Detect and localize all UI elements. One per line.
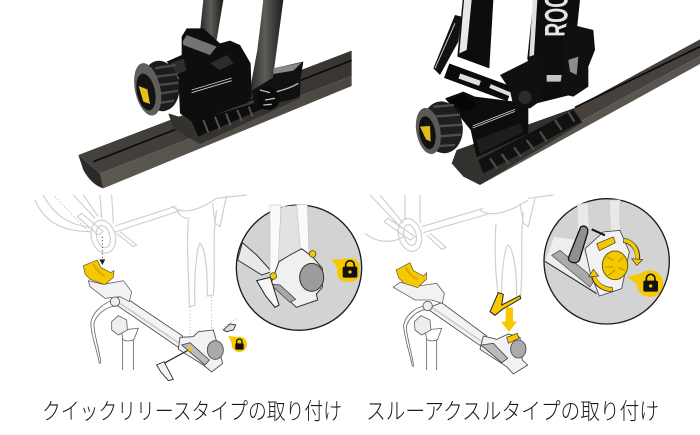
yellow thru axle lever [490, 293, 521, 315]
caption: thru axle: スルーアクスルタイプの取り付け [366, 398, 659, 424]
diagram: quick release installation [35, 195, 362, 381]
front mount [480, 334, 528, 374]
yellow insert [507, 333, 519, 343]
photo: thru axle mount on rail [412, 0, 700, 185]
front mount [178, 330, 223, 372]
tube [427, 303, 487, 347]
thru axle and lever [433, 15, 545, 108]
yellow wheel cradle [83, 260, 114, 285]
diagram: thru axle installation [365, 195, 669, 374]
cable [404, 306, 427, 367]
quick release skewer lever [157, 351, 187, 381]
teeth [270, 284, 296, 302]
photo: quick release mount on rail [78, 0, 352, 188]
mount base with teeth [168, 90, 300, 144]
rail [480, 39, 700, 185]
yellow bolts [309, 251, 316, 257]
bicycle fork and wheel outline [365, 195, 553, 297]
stand post [414, 316, 442, 370]
stand and mounts [393, 263, 528, 374]
rear mount [393, 282, 444, 303]
icon: large lock [332, 258, 360, 282]
disc brake caliper [547, 23, 595, 97]
detail circle: thru axle [544, 199, 669, 324]
clamp body [167, 28, 252, 122]
bicycle fork and wheel outline [35, 195, 247, 307]
arrow: yellow down [501, 307, 517, 332]
icon: small lock [228, 336, 247, 352]
rotation arrow: top [623, 240, 643, 265]
fork legs [200, 0, 283, 89]
yellow knob [602, 251, 628, 280]
tube and teeth [545, 237, 598, 292]
tube [112, 295, 183, 347]
mount body [585, 230, 629, 296]
gray lever [568, 226, 588, 263]
stand post [112, 316, 138, 370]
lever head [110, 297, 120, 306]
rotation arrow: bottom [589, 269, 613, 289]
rail [78, 51, 352, 188]
quick release lever [252, 62, 303, 110]
icon: large lock [627, 270, 663, 297]
lever head [423, 301, 432, 311]
lever [257, 277, 279, 307]
rear mount [88, 281, 132, 302]
fork blades [577, 200, 620, 234]
cable [91, 300, 115, 364]
fork blades [270, 205, 309, 277]
caption: quick release: クイックリリースタイプの取り付け [42, 398, 342, 424]
pale fork shadow [278, 205, 301, 260]
stand and mounts [83, 259, 247, 381]
mount body [271, 249, 322, 307]
yellow wheel cradle [396, 263, 427, 288]
yellow insert [597, 237, 615, 251]
arrow: down to cradle [99, 259, 105, 265]
skewer nut [223, 324, 236, 332]
detail circle: quick release [236, 205, 362, 330]
fork legs with logo [457, 0, 580, 103]
mount base with teeth [452, 108, 583, 185]
dotted guide lines [55, 197, 237, 337]
small black arrow [592, 229, 605, 235]
clamp body [445, 92, 528, 157]
ribbed knob with logo [412, 99, 466, 156]
tube [238, 243, 272, 275]
knob [300, 263, 324, 291]
ribbed knob with logo [130, 58, 183, 118]
